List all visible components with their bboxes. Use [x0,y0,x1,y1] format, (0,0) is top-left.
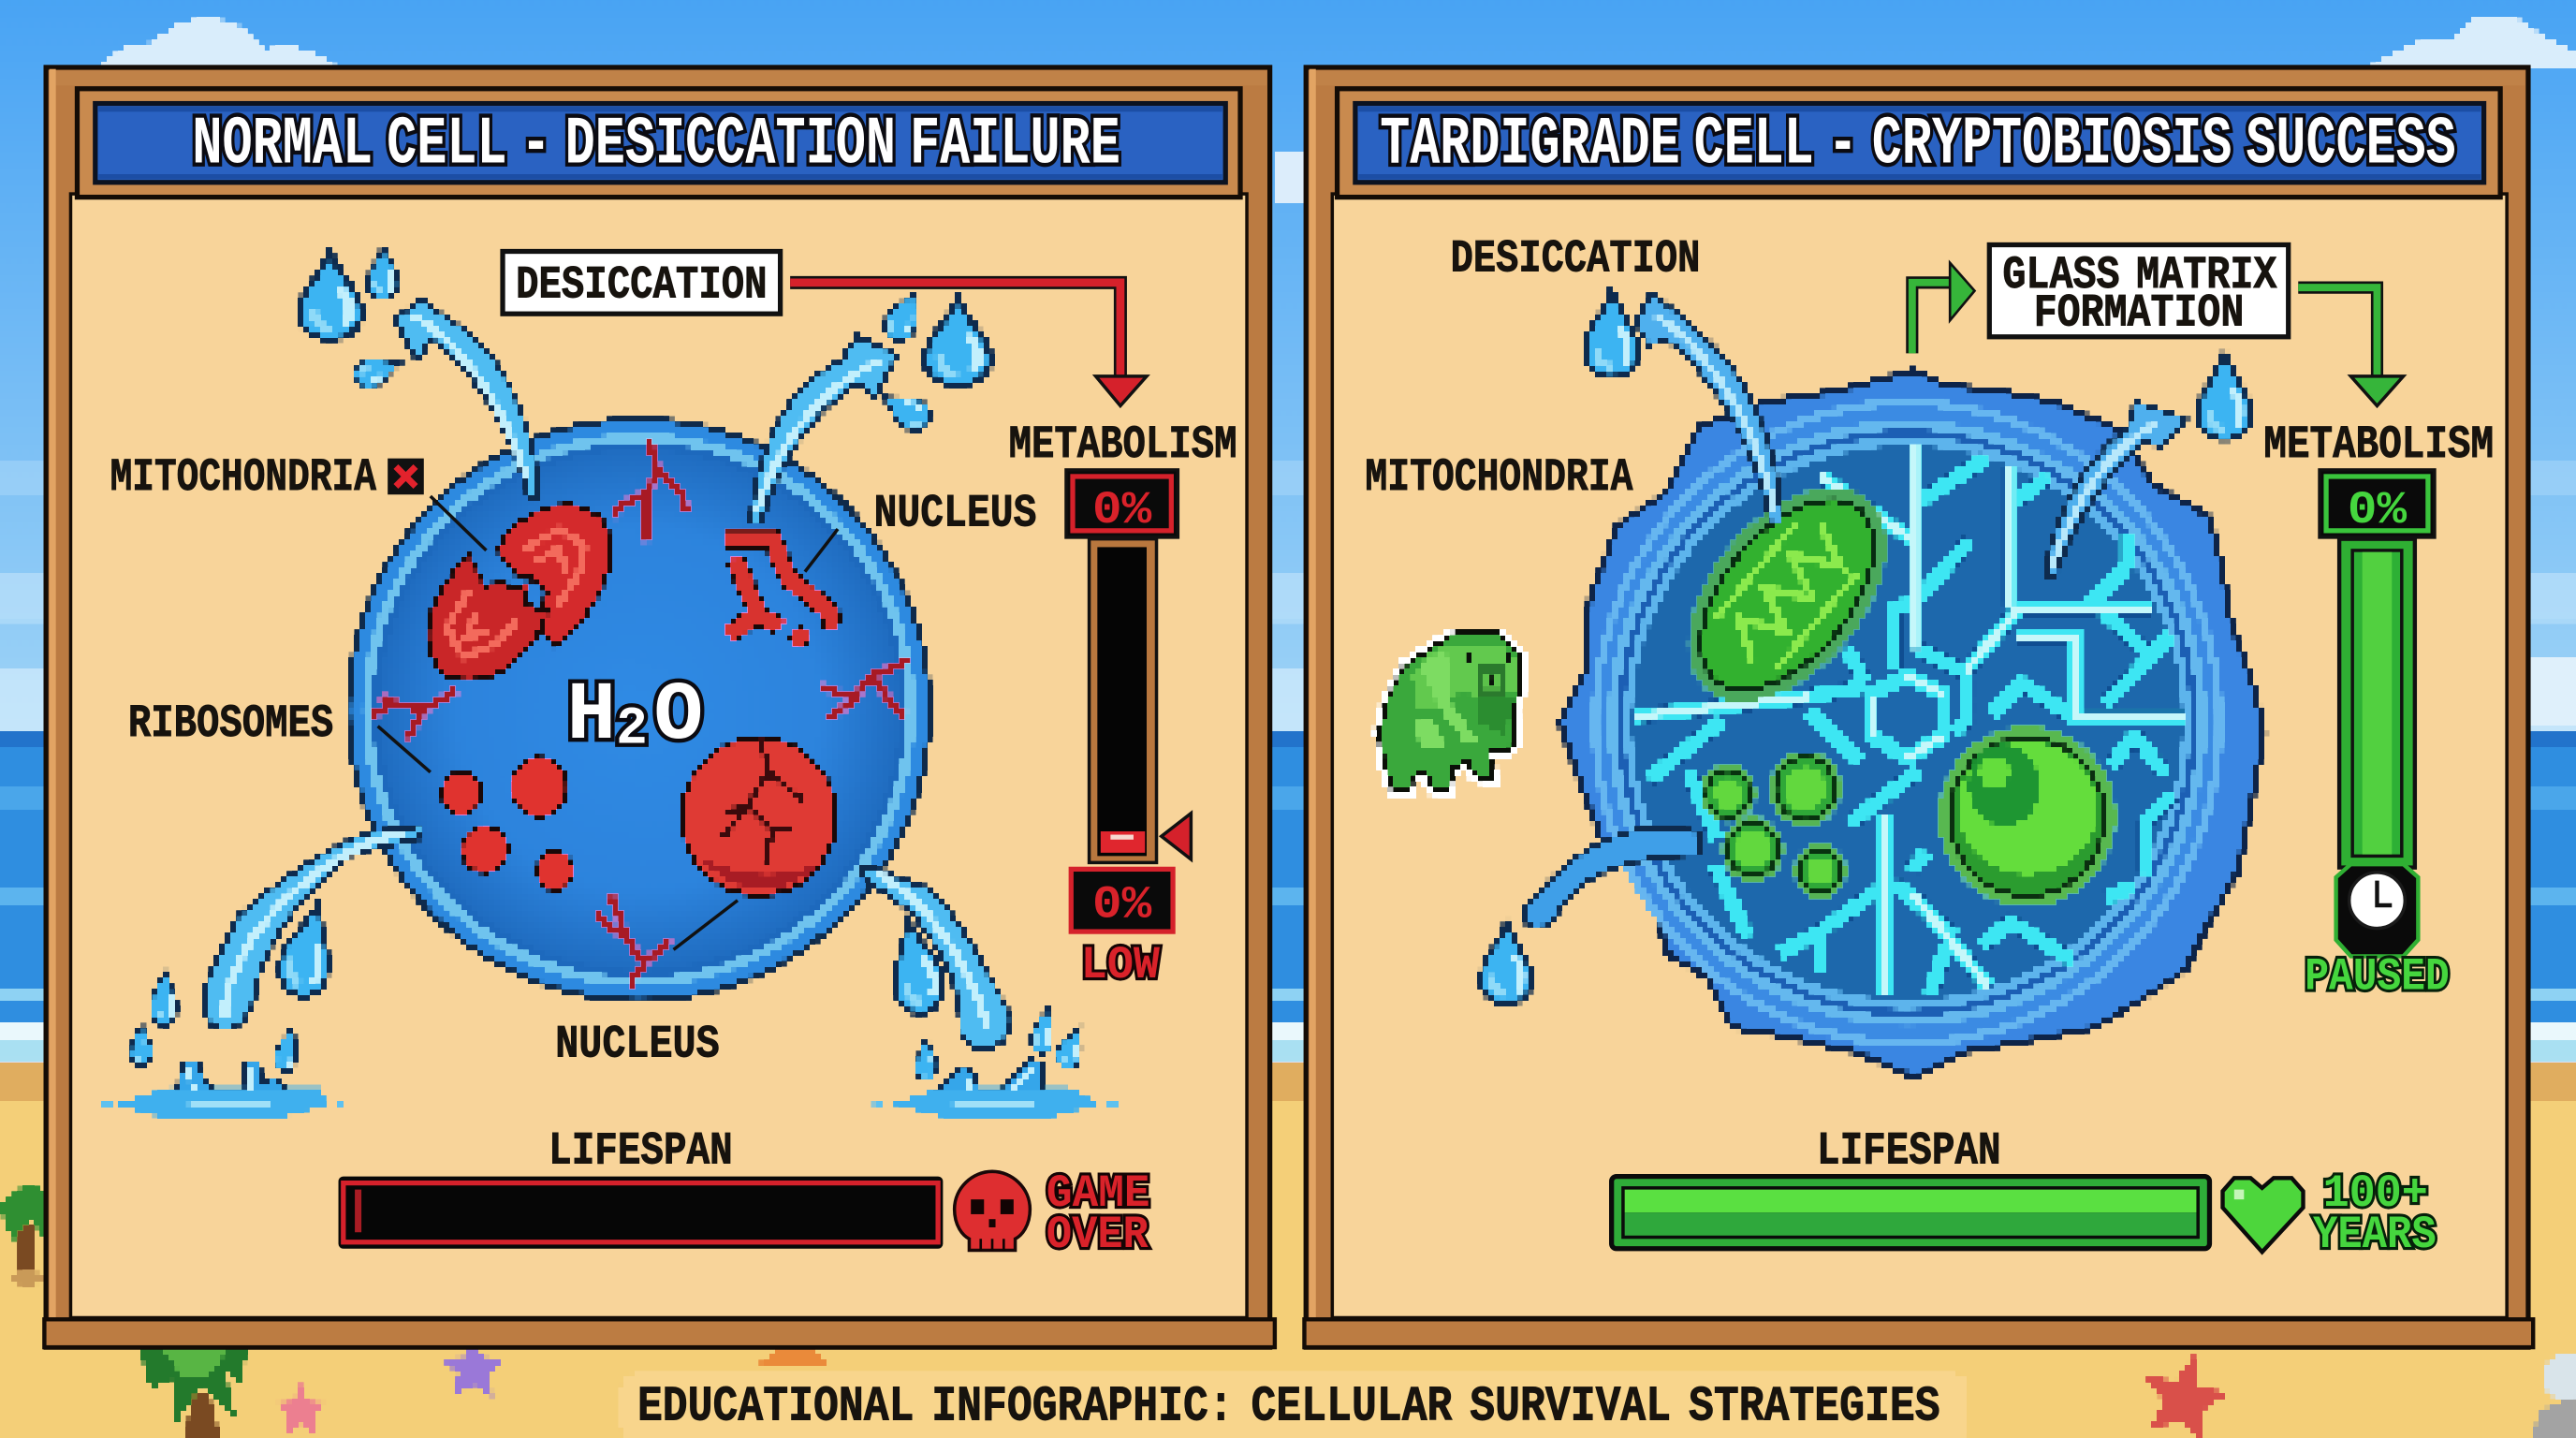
puddle left [102,1062,345,1121]
icon: failure mark [388,459,424,494]
arrow: cell to glass matrix [1912,263,1975,353]
protective outer shell [1560,372,2263,1077]
cracks [372,440,909,986]
label: metabolism: METABOLISM [1009,418,1237,471]
gauge tube [2339,539,2415,868]
icon: palm tree [139,1347,246,1438]
gauge: metabolism low [1009,418,1237,991]
icon: palm tree left edge [0,1186,44,1284]
organelle: intact nucleus [1939,726,2115,907]
ribosomes [442,757,573,890]
icon: clock [2336,864,2418,956]
readout top [1066,470,1178,537]
membrane [346,418,931,1003]
gauge: lifespan empty [339,1125,1149,1261]
readout bottom: 0% [1092,878,1152,931]
lifespan bar [339,1177,943,1249]
label: nucleus upper: NUCLEUS [874,488,1036,540]
gauge: lifespan full [1612,1125,2437,1261]
organelle: cracked nucleus [681,738,836,895]
icon: pink starfish [275,1385,326,1434]
readout: 0% [2348,484,2408,536]
label: lifespan: LIFESPAN [549,1125,733,1178]
icon: skull [955,1171,1030,1251]
status: game over: OVER [1046,1209,1149,1261]
label: H2O: H [566,670,616,763]
label: H2O: 2 [616,698,648,758]
puddle right [874,1060,1119,1121]
water loss: lower streams and puddles [102,827,1119,1121]
readout bottom [1071,869,1173,932]
icon: red starfish [2136,1347,2234,1438]
panel: tardigrade cell [1304,67,2533,1347]
heading: normal cell: NORMAL CELL - DESICCATION FAILURE [192,107,1120,183]
glass matrix crystals [1634,447,2183,994]
label: mitochondria: MITOCHONDRIA [1365,451,1633,504]
label: H2O: O [653,670,703,763]
gauge: metabolism paused [2263,418,2494,1004]
cell diagram: vitrified cell [1560,372,2263,1077]
pointer [1162,814,1191,859]
label: desiccation: DESICCATION [1451,233,1700,286]
label: ribosomes: RIBOSOMES [128,697,333,750]
readout top: 0% [1092,484,1152,536]
panel frame [44,67,1275,1347]
label: lifespan: LIFESPAN [1817,1125,2001,1178]
arrow: water leaving upper left [396,298,539,496]
status: 100+ years: YEARS [2313,1209,2437,1261]
callout: desiccation: DESICCATION [516,259,768,312]
stream: lower left [205,827,422,1029]
status: low: LOW [1081,939,1161,991]
status: game over [1046,1167,1149,1261]
leader lines [378,496,838,949]
status: 100+ years [2313,1167,2437,1261]
callout: glass matrix formation: GLASS MATRIX [2002,249,2277,301]
footer strip [621,1373,1968,1438]
panel: normal cell [44,67,1275,1347]
icon: heart [2223,1178,2304,1252]
arrow: glass matrix to metabolism [2298,287,2404,405]
status: game over: GAME [1046,1167,1149,1220]
panel frame [1304,67,2533,1347]
readout [2320,470,2435,537]
icon: shell at corner [2530,1354,2576,1438]
drops lower [131,897,1090,1079]
callout: glass matrix formation: FORMATION [2034,286,2244,339]
status: 100+ years: 100+ [2323,1167,2428,1220]
arrow: water leaving upper right [751,337,897,522]
stream: lower right [862,866,1010,1049]
cell diagram: dehydrated cell [346,418,931,1003]
drops upper [300,247,989,435]
callout: glass matrix formation [1989,244,2289,339]
icon: purple starfish [443,1336,504,1396]
footer caption: EDUCATIONAL INFOGRAPHIC: CELLULAR SURVIVAL STRATEGIES [637,1378,1940,1434]
water loss: streams and drops [1482,291,2250,1004]
label: H2O [566,670,703,763]
arrow: water leaving upper left [1636,292,1780,522]
organelle: broken nucleus fragment [724,539,833,647]
organelle: ruptured mitochondrion [428,505,611,680]
membrane rings [1595,403,2219,1043]
water loss: upper streams and drops [300,247,989,522]
icon: orange starfish [755,1347,828,1367]
drops [1482,291,2250,1004]
arrow: water leaving upper right [2045,403,2185,579]
arrow: desiccation to metabolism [790,283,1147,405]
status: paused: PAUSED [2305,951,2450,1004]
stream: lower left [1524,829,1700,928]
organelle: intact mitochondrion [1649,450,1925,739]
ribosomes [1700,751,1847,899]
lifespan bar [1612,1177,2209,1249]
beach decorations [0,1186,2576,1438]
label: mitochondria: MITOCHONDRIA [110,451,376,504]
label: metabolism: METABOLISM [2263,418,2494,471]
label: nucleus lower: NUCLEUS [555,1018,720,1070]
gauge tube [1090,539,1157,862]
icon: tardigrade [1380,634,1521,790]
